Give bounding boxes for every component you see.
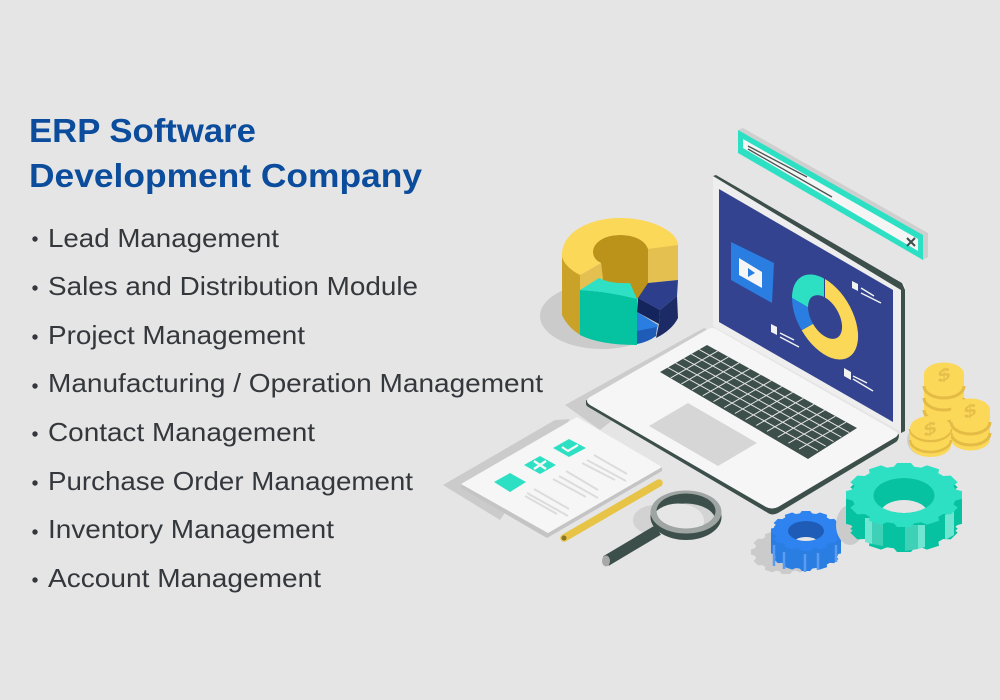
feature list: Purchase Order Management	[48, 466, 414, 496]
video card	[731, 242, 774, 303]
blue gear	[751, 511, 841, 574]
chart legends	[771, 281, 881, 391]
laptop screen	[719, 189, 893, 422]
pie navy slice	[638, 280, 678, 310]
pencil	[562, 483, 659, 540]
checklist boxes	[494, 439, 586, 492]
title	[29, 112, 423, 194]
feature list: Lead Management	[48, 223, 280, 253]
pie chart	[540, 218, 678, 349]
magnifying glass	[602, 490, 722, 566]
coin stack left: $	[924, 417, 937, 442]
teal gear shadow	[836, 505, 864, 545]
pie shadow	[540, 283, 664, 349]
pie left wall	[562, 255, 582, 336]
pie blue slice	[637, 312, 658, 332]
laptop base	[586, 400, 899, 514]
donut chart	[792, 260, 858, 374]
checklist text lines	[525, 455, 627, 516]
document sheet	[461, 467, 662, 538]
coin stack tall: $	[938, 363, 951, 388]
trackpad	[649, 403, 757, 466]
feature list: Sales and Distribution Module	[48, 271, 418, 301]
feature list: Contact Management	[48, 417, 316, 447]
feature list: Account Management	[48, 563, 322, 593]
document	[443, 417, 662, 538]
pie right wall	[648, 243, 678, 283]
blue gear shadow	[751, 530, 821, 574]
laptop shadow	[565, 328, 720, 430]
teal gear	[836, 463, 962, 552]
document shadow	[443, 419, 570, 520]
laptop lid	[713, 175, 905, 432]
floating window	[738, 128, 928, 260]
keyboard	[660, 345, 857, 459]
handle	[606, 530, 658, 561]
feature list: Project Management	[48, 320, 306, 350]
teal gear side stripes	[865, 510, 954, 551]
title: ERP Software	[29, 112, 256, 149]
lens shadow	[633, 505, 677, 535]
laptop	[565, 175, 905, 514]
ring	[650, 494, 722, 540]
teal gear hole	[874, 478, 934, 513]
pie hole	[593, 235, 649, 300]
coin stack right: $	[964, 399, 977, 424]
feature list: Inventory Management	[48, 514, 335, 544]
pie top yellow	[562, 218, 678, 275]
feature list	[32, 223, 544, 593]
title: Development Company	[29, 157, 423, 194]
coins	[907, 362, 990, 457]
blue gear hole	[788, 521, 824, 541]
coins shadow	[907, 424, 943, 456]
pie teal slice	[580, 290, 637, 345]
feature list: Manufacturing / Operation Management	[48, 368, 544, 398]
